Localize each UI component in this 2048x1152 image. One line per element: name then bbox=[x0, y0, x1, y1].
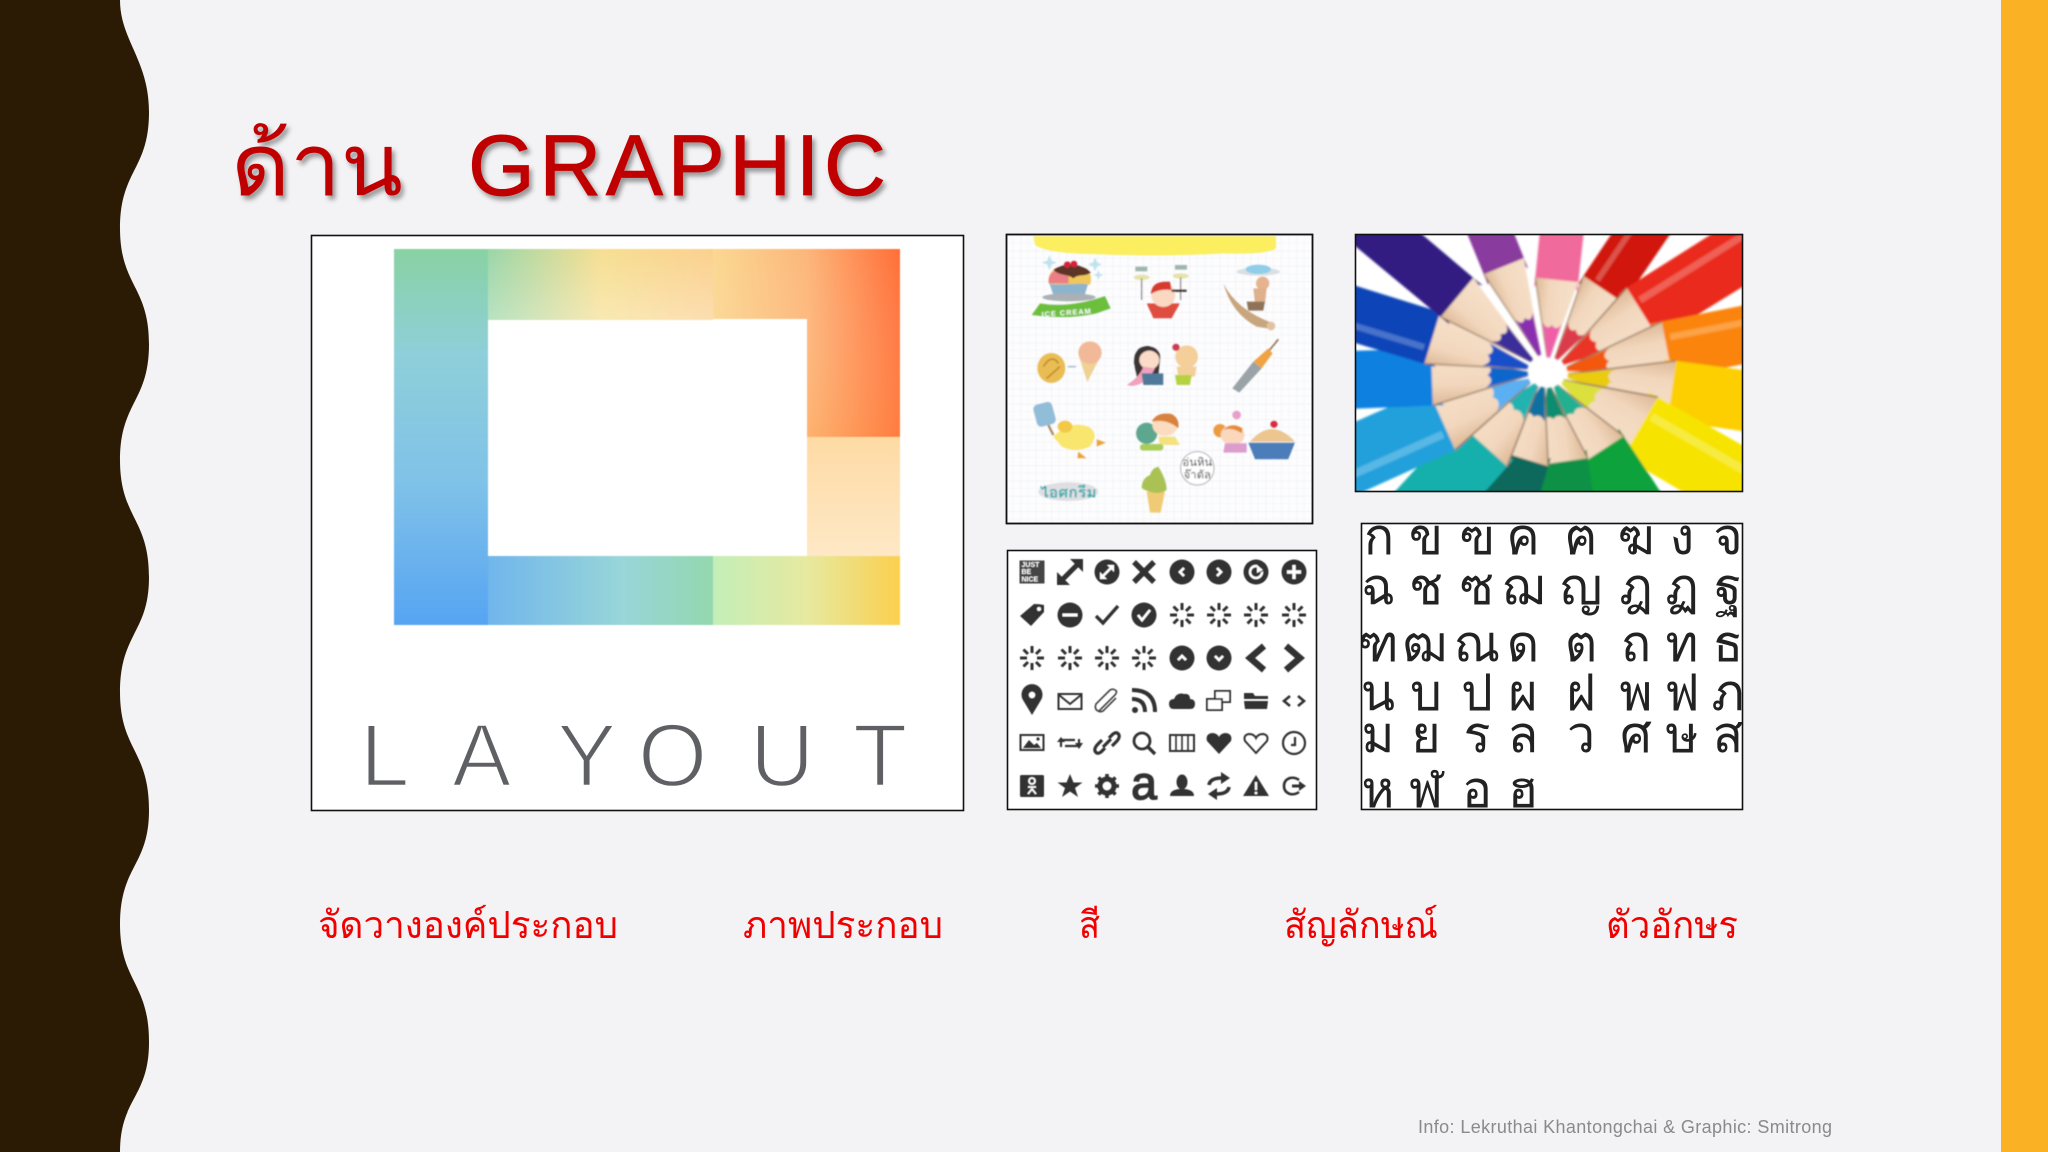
icon: solid heart bbox=[1207, 733, 1231, 754]
alphabet row 1: ข bbox=[1409, 509, 1443, 565]
alphabet row 4: ภ bbox=[1712, 665, 1744, 721]
icon: mail bbox=[1058, 694, 1082, 709]
alphabet row 5 bbox=[1364, 722, 1742, 752]
alphabet row 2: ฌ bbox=[1502, 559, 1544, 615]
alphabet row 2: ฉ bbox=[1361, 559, 1395, 615]
icon: star bbox=[1058, 774, 1082, 797]
pencil: dark green bbox=[1539, 386, 1592, 491]
alphabet row 4: ฝ bbox=[1566, 665, 1596, 721]
icon: spinner bbox=[1207, 603, 1231, 627]
alphabet row 3: ด bbox=[1507, 616, 1539, 672]
pencil: dark red bbox=[1553, 235, 1672, 362]
sticker: girl and boy bbox=[1127, 344, 1198, 386]
alphabet row 1 bbox=[1366, 526, 1738, 554]
alphabet row 4: พ bbox=[1620, 665, 1652, 721]
alphabet row 2: ซ bbox=[1460, 559, 1494, 615]
caption: illustration: ภาพประกอบ bbox=[743, 905, 943, 947]
icon: circle up bbox=[1170, 646, 1194, 670]
icon: spinner bbox=[1095, 646, 1119, 670]
alphabet row 4: บ bbox=[1410, 665, 1442, 721]
image panel: ice cream stickers bbox=[1006, 234, 1312, 524]
title bbox=[231, 118, 886, 214]
alphabet row 2: ฐ bbox=[1714, 559, 1742, 617]
alphabet row 3: ฑ bbox=[1357, 616, 1399, 672]
alphabet row 5: ว bbox=[1567, 707, 1595, 763]
icon: clock bbox=[1283, 732, 1305, 754]
alphabet row 2: ช bbox=[1409, 559, 1443, 615]
sticker: thai speech circle: อ่นหิน bbox=[1182, 457, 1212, 469]
pencil: yellow bbox=[1560, 378, 1742, 491]
alphabet row 1: ง bbox=[1670, 509, 1694, 565]
yellow brush stroke bbox=[1033, 236, 1276, 256]
sticker: waiter with signs bbox=[1134, 265, 1189, 318]
icon: spinner bbox=[1282, 603, 1306, 627]
pencil: indigo bbox=[1356, 235, 1534, 364]
icon: code bbox=[1284, 696, 1304, 706]
pencil: red bbox=[1560, 235, 1742, 366]
icon: sign out bbox=[1284, 778, 1306, 794]
icon: chevron left bbox=[1250, 646, 1264, 670]
icon: circle down bbox=[1206, 646, 1232, 670]
icon: gear bbox=[1095, 774, 1119, 798]
alphabet row 3: ถ bbox=[1621, 616, 1651, 672]
pencil: sky blue bbox=[1077, 349, 1544, 608]
yellow right band bbox=[2001, 0, 2048, 1152]
sticker: girl with bowl bbox=[1213, 411, 1295, 459]
alphabet row 1: ค bbox=[1506, 509, 1540, 565]
alphabet row 2: ฏ bbox=[1665, 559, 1699, 615]
alphabet row 5: ร bbox=[1464, 707, 1490, 763]
icon: search bbox=[1134, 733, 1155, 754]
alphabet row 5: ส bbox=[1713, 707, 1743, 763]
image panel: colored pencils bbox=[1120, 234, 1744, 740]
icon: spinner bbox=[1244, 603, 1268, 627]
icon: close x bbox=[1134, 562, 1154, 582]
captions bbox=[318, 904, 1738, 947]
icon: paper clip bbox=[1095, 689, 1116, 712]
icon: check bbox=[1096, 606, 1118, 623]
pencil: green bbox=[1552, 384, 1662, 491]
alphabet row 2 bbox=[1364, 574, 1739, 618]
graph paper background bbox=[1007, 235, 1311, 523]
icon: circle reload bbox=[1244, 560, 1268, 584]
pencil: pink bbox=[1533, 235, 1585, 359]
alphabet row 4: ฟ bbox=[1664, 665, 1700, 721]
icon: spinner bbox=[1020, 646, 1044, 670]
icon: just be nice: JUST bbox=[1022, 562, 1040, 569]
icon: spinner bbox=[1132, 646, 1156, 670]
alphabet row 6: ฬ bbox=[1409, 762, 1445, 818]
icon: folder bbox=[1244, 693, 1268, 709]
icon: circle expand bbox=[1094, 560, 1120, 584]
sticker: ice cream sundae: ICE CREAM bbox=[1041, 306, 1092, 319]
alphabet row 4: น bbox=[1361, 665, 1395, 721]
alphabet row 2: ญ bbox=[1560, 559, 1602, 615]
alphabet row 3: ณ bbox=[1454, 616, 1500, 672]
alphabet row 1: ฆ bbox=[1617, 509, 1655, 565]
alphabet row 1: จ bbox=[1713, 509, 1743, 565]
alphabet row 1: ก bbox=[1364, 509, 1394, 565]
icon: expand bbox=[1057, 559, 1083, 585]
icon: rss bbox=[1132, 690, 1155, 713]
image panel: thai alphabet bbox=[1357, 509, 1744, 818]
alphabet row 5: ษ bbox=[1666, 707, 1698, 763]
caption: color: สี bbox=[1079, 905, 1100, 947]
alphabet row 5: ม bbox=[1362, 707, 1394, 763]
icon: refresh bbox=[1208, 772, 1230, 800]
icon: ok square bbox=[1020, 775, 1044, 797]
icon: letter a: a bbox=[1131, 757, 1157, 809]
credit line: Info: Lekruthai Khantongchai & Graphic: Smitrong bbox=[1418, 1117, 1832, 1137]
icon: cloud bbox=[1169, 694, 1195, 709]
icon: film bbox=[1170, 735, 1194, 751]
icon: just be nice bbox=[1020, 560, 1044, 584]
icon: retweet bbox=[1057, 737, 1083, 749]
sticker: thai word label: ไอศกรีม bbox=[1040, 484, 1097, 501]
caption: layout: จัดวางองค์ประกอบ bbox=[318, 904, 618, 947]
icon: windows bbox=[1207, 691, 1230, 710]
alphabet row 3: ธ bbox=[1713, 616, 1743, 672]
title: ด้าน bbox=[231, 118, 403, 214]
icon: warning bbox=[1243, 775, 1269, 796]
alphabet row 1: ฃ bbox=[1459, 509, 1495, 565]
wavy dark left band bbox=[0, 0, 149, 1152]
sticker: thai speech circle: จ๊าตัล bbox=[1184, 468, 1211, 481]
alphabet row 4: ป bbox=[1461, 665, 1493, 721]
icon: chevron right bbox=[1286, 646, 1300, 670]
pencil: deep teal bbox=[1484, 385, 1552, 491]
alphabet row 6 bbox=[1364, 770, 1534, 808]
alphabet row 2: ฎ bbox=[1619, 559, 1653, 615]
alphabet row 1: ฅ bbox=[1564, 509, 1598, 565]
pencil: orange bbox=[1564, 304, 1742, 374]
pencil: teal bbox=[1394, 382, 1540, 491]
image panel: icon grid bbox=[1008, 550, 1316, 810]
logo: gradient square frame bbox=[394, 249, 900, 625]
title: GRAPHIC bbox=[468, 118, 886, 214]
icon: circle minus bbox=[1058, 602, 1082, 628]
alphabet row 5: ล bbox=[1508, 707, 1538, 763]
alphabet row 4: ผ bbox=[1508, 665, 1538, 721]
icon: person bbox=[1170, 774, 1194, 796]
icon: picture bbox=[1020, 735, 1044, 750]
icon: outline heart bbox=[1244, 734, 1268, 753]
image panel: layout logo bbox=[312, 236, 964, 810]
sticker: boy with melon bbox=[1136, 414, 1180, 451]
icon: circle left bbox=[1170, 560, 1194, 584]
pencil: royal blue bbox=[1356, 284, 1530, 371]
sticker: man carrying cloud bbox=[1223, 265, 1280, 330]
alphabet row 3: ต bbox=[1565, 616, 1597, 672]
icon: circle right bbox=[1206, 560, 1232, 584]
alphabet row 3 bbox=[1362, 632, 1740, 662]
logo wordmark: LAYOUT bbox=[360, 705, 907, 805]
sticker: green soft serve cone bbox=[1142, 467, 1167, 513]
caption: typeface: ตัวอักษร bbox=[1606, 905, 1738, 947]
icon: just be nice: NICE bbox=[1022, 576, 1039, 584]
alphabet row 4 bbox=[1364, 674, 1742, 710]
icon: spinner bbox=[1170, 603, 1194, 627]
caption: symbols: สัญลักษณ์ bbox=[1284, 904, 1438, 947]
sticker: thai speech circle bbox=[1181, 452, 1214, 485]
pencil: blue bbox=[1356, 348, 1530, 410]
icon: spinner bbox=[1058, 646, 1082, 670]
sticker: ice cream sundae bbox=[1032, 255, 1111, 319]
alphabet row 6: อ bbox=[1462, 762, 1492, 818]
alphabet row 3: ท bbox=[1666, 616, 1698, 672]
alphabet row 5: ศ bbox=[1620, 707, 1652, 763]
icon: circle check bbox=[1132, 602, 1156, 628]
pencil: purple bbox=[1466, 235, 1542, 358]
alphabet row 6: ห bbox=[1362, 762, 1394, 818]
icon: link bbox=[1095, 733, 1119, 753]
alphabet row 3: ฒ bbox=[1402, 616, 1448, 672]
alphabet row 5: ย bbox=[1411, 707, 1441, 763]
icon: tag bbox=[1020, 604, 1044, 626]
alphabet row 6: ฮ bbox=[1508, 762, 1538, 818]
sticker: coin to cone bbox=[1037, 341, 1102, 383]
sticker: popsicle and bird bbox=[1032, 401, 1106, 458]
icon: just be nice: BE bbox=[1022, 569, 1032, 576]
sticker: orange tool bbox=[1232, 339, 1278, 393]
icon: map pin bbox=[1022, 684, 1042, 715]
icon: circle plus bbox=[1282, 560, 1306, 584]
pencil: golden yellow bbox=[1566, 358, 1742, 433]
